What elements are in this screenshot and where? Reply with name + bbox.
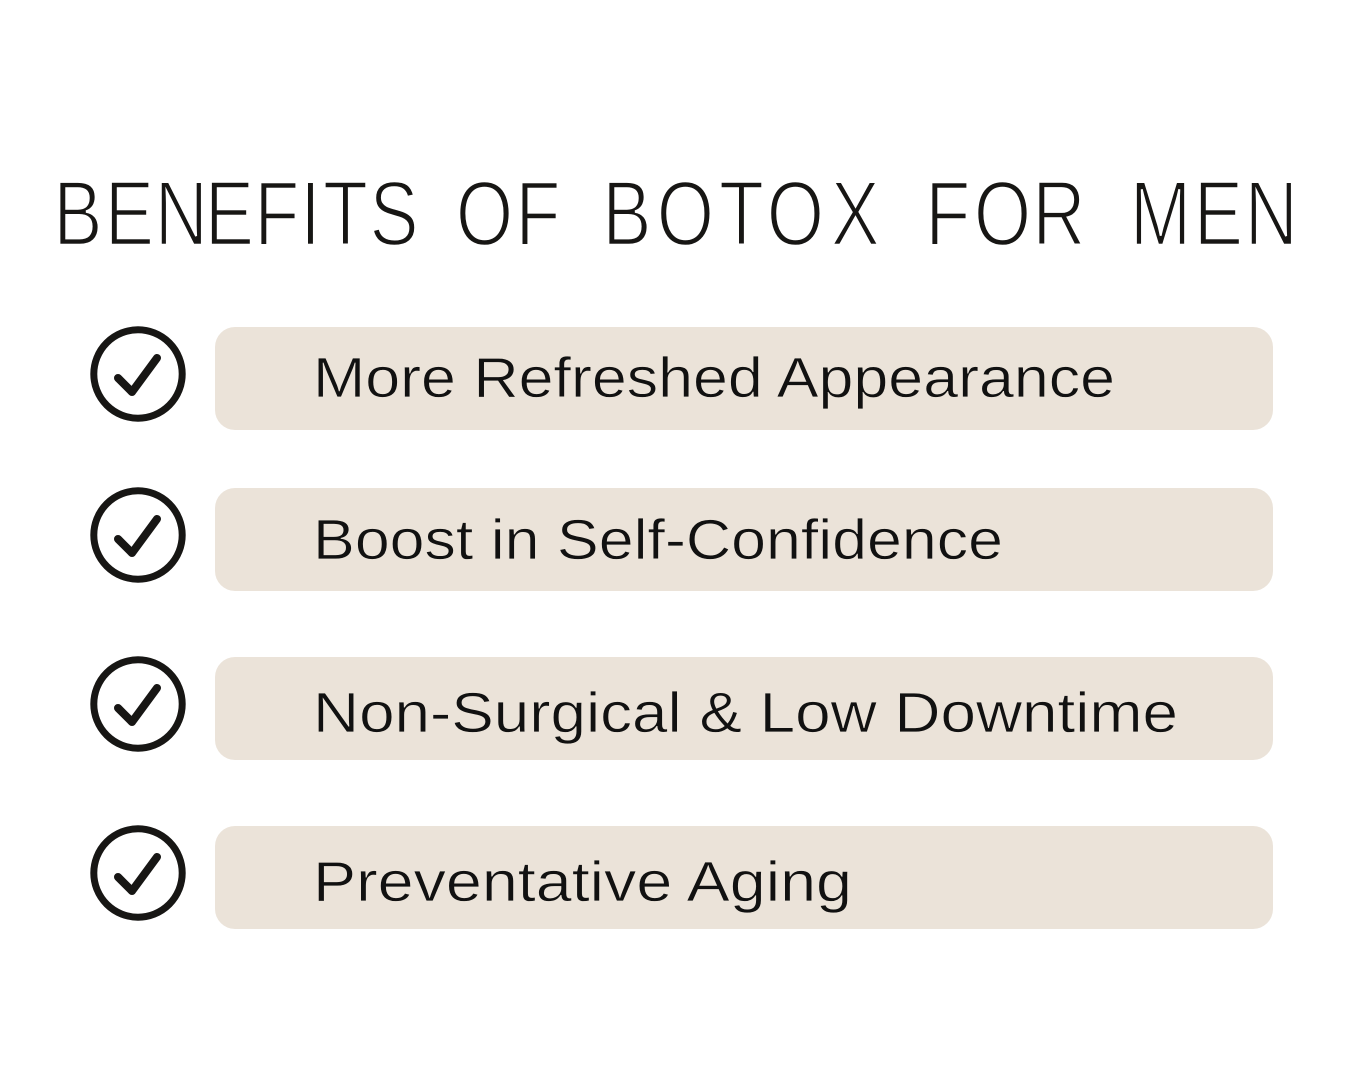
label pill 3: Non-Surgical & Low Downtime xyxy=(313,681,1178,745)
item: Boost in Self-Confidence xyxy=(94,488,1273,591)
label pill 2: Boost in Self-Confidence xyxy=(313,508,1003,572)
label pill 2 xyxy=(215,488,1273,591)
item: Preventative Aging xyxy=(94,826,1273,929)
label pill 1: More Refreshed Appearance xyxy=(313,346,1115,410)
title: BENEFITS OF BOTOX FOR MEN xyxy=(53,162,1298,265)
label pill 1 xyxy=(215,327,1273,430)
icon: check mark circle 3 xyxy=(94,660,182,748)
label pill 4 xyxy=(215,826,1273,929)
icon: check mark circle 2 xyxy=(94,491,182,579)
icon: check mark circle 4 xyxy=(94,829,182,917)
label pill 3 xyxy=(215,657,1273,760)
item: Non-Surgical & Low Downtime xyxy=(94,657,1273,760)
label pill 4: Preventative Aging xyxy=(313,850,852,914)
icon: check mark circle 1 xyxy=(94,330,182,418)
item: More Refreshed Appearance xyxy=(94,327,1273,430)
